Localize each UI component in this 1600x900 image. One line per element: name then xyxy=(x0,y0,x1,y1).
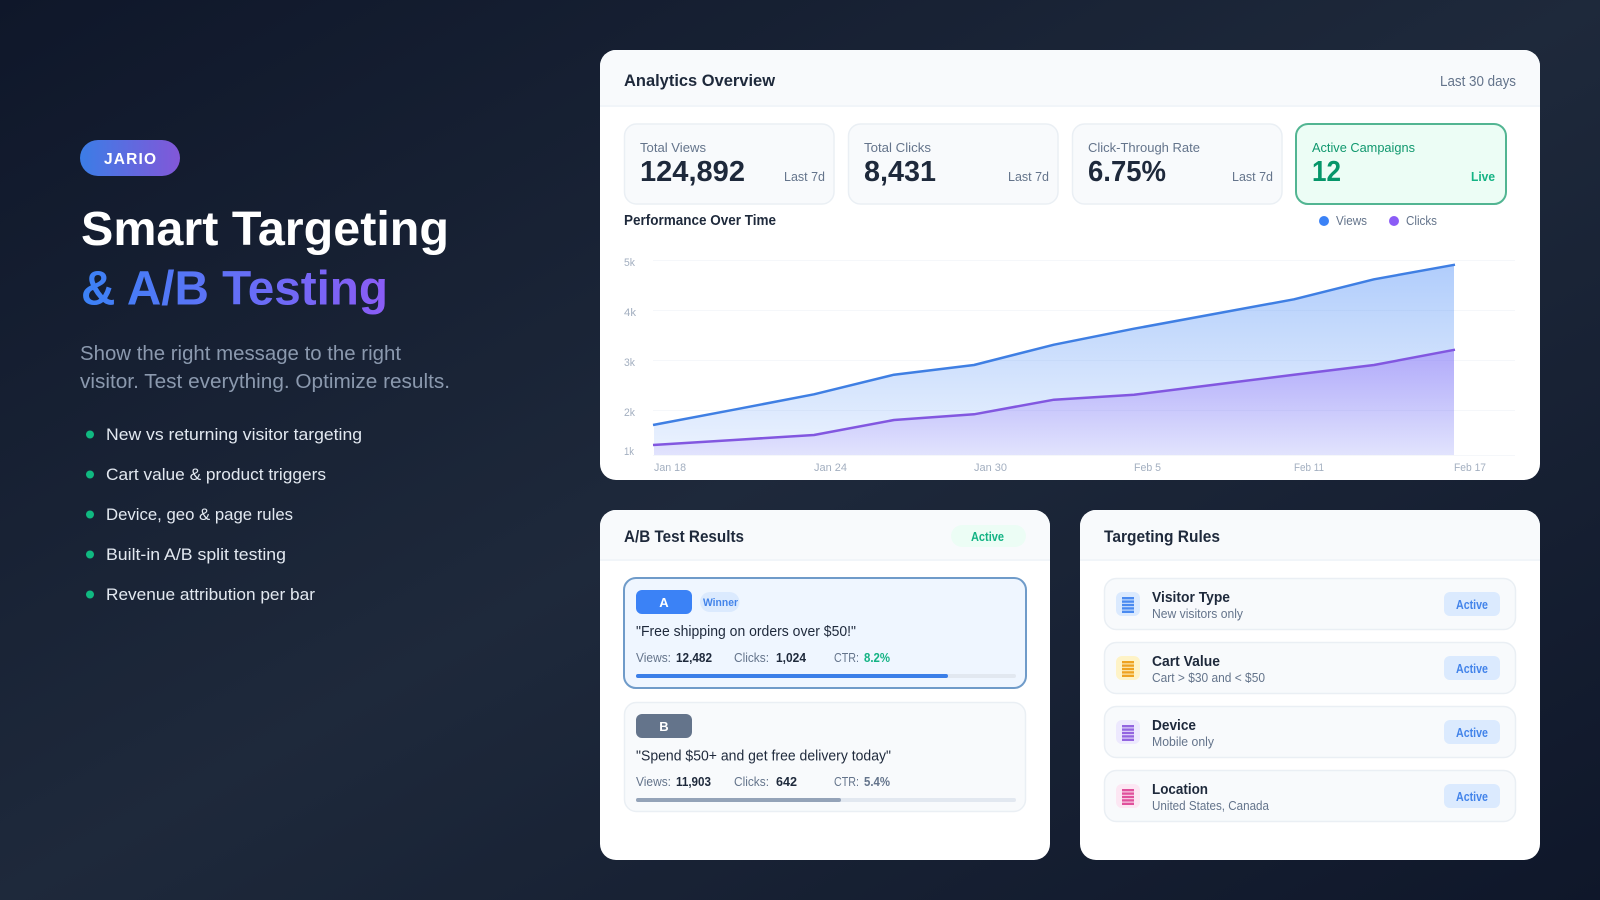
variant B progress bar xyxy=(636,798,1016,802)
subtitle: Show the right message to the right xyxy=(80,343,401,365)
area chart: performance over time xyxy=(624,257,1515,474)
variant B stats xyxy=(636,775,890,789)
rule: visitor type: New visitors only xyxy=(1152,607,1244,621)
icon: visitor type xyxy=(1116,592,1140,616)
title xyxy=(81,203,449,316)
feature: new vs returning: New vs returning visitor targeting xyxy=(106,425,362,444)
chart heading: Performance Over Time xyxy=(624,213,776,229)
x axis labels: Feb 17 xyxy=(1454,462,1486,474)
variant A stats: 8.2% xyxy=(864,651,890,665)
stat card: click-through rate xyxy=(1072,124,1282,204)
variant B stats: 5.4% xyxy=(864,775,890,789)
rule: device: Mobile only xyxy=(1152,735,1215,749)
subtitle xyxy=(80,343,450,393)
rule: visitor type xyxy=(1104,578,1516,630)
x axis labels: Jan 30 xyxy=(974,462,1007,474)
y axis labels: 2k xyxy=(624,407,635,419)
y axis labels: 3k xyxy=(624,357,635,369)
stat card: total views: Last 7d xyxy=(784,170,825,184)
left column: hero copy xyxy=(80,140,450,604)
variant A stats: Clicks: xyxy=(734,651,769,665)
subtitle: visitor. Test everything. Optimize results. xyxy=(80,371,450,393)
stat card: total views: 124,892 xyxy=(640,156,745,188)
variant B stats: CTR: xyxy=(834,775,859,789)
stat card: active campaigns: Active Campaigns xyxy=(1312,140,1415,155)
stat card: total clicks: 8,431 xyxy=(864,156,936,188)
status: cart value active: Active xyxy=(1456,662,1488,676)
status: location active: Active xyxy=(1456,790,1488,804)
panel header: targeting: Targeting Rules xyxy=(1104,528,1220,546)
status: cart value active xyxy=(1444,656,1500,680)
views area xyxy=(654,265,1454,455)
panel: A/B test results xyxy=(600,510,1050,860)
variant A stats xyxy=(636,651,890,665)
variant B stats: 642 xyxy=(776,775,797,789)
feature: cart value: Cart value & product triggers xyxy=(106,465,326,484)
status pill: active xyxy=(951,525,1026,547)
variant A message: "Free shipping on orders over $50!" xyxy=(636,624,856,640)
stat card: total clicks: Last 7d xyxy=(1008,170,1049,184)
y axis labels: 4k xyxy=(624,307,637,319)
variant B message: "Spend $50+ and get free delivery today" xyxy=(636,748,891,764)
winner tag xyxy=(700,592,740,612)
panel header: A/B test: A/B Test Results xyxy=(624,528,744,546)
y axis labels: 5k xyxy=(624,257,635,269)
stat card: click-through rate: Last 7d xyxy=(1232,170,1273,184)
status: visitor type active xyxy=(1444,592,1500,616)
y axis labels xyxy=(624,257,637,458)
variant B stats: 11,903 xyxy=(676,775,711,789)
stat card: active campaigns xyxy=(1296,124,1506,204)
stat card: total clicks xyxy=(848,124,1058,204)
status: device active: Active xyxy=(1456,726,1488,740)
x axis labels: Jan 18 xyxy=(654,462,686,474)
status: visitor type active: Active xyxy=(1456,598,1488,612)
rule: cart value xyxy=(1104,642,1516,694)
stat card: click-through rate: 6.75% xyxy=(1088,156,1166,188)
feature: split testing: Built-in A/B split testing xyxy=(106,545,286,564)
variant B stats: Views: xyxy=(636,775,671,789)
y axis labels: 1k xyxy=(624,446,634,458)
feature: revenue attribution: Revenue attribution per bar xyxy=(106,585,315,604)
views line xyxy=(653,265,1455,425)
variant A stats: CTR: xyxy=(834,651,859,665)
feature: device geo: Device, geo & page rules xyxy=(106,505,293,524)
variant A card xyxy=(624,578,1026,688)
clicks line xyxy=(653,350,1455,445)
variant B stats: Clicks: xyxy=(734,775,769,789)
stat card: click-through rate: Click-Through Rate xyxy=(1088,140,1200,155)
chart legend: Views xyxy=(1336,214,1367,228)
stat card: total views: Total Views xyxy=(640,140,707,155)
clicks area xyxy=(654,350,1454,455)
variant A stats: Views: xyxy=(636,651,671,665)
x axis labels xyxy=(654,462,1486,474)
rule: device: Device xyxy=(1152,718,1196,734)
brand pill: JARIO xyxy=(80,140,180,176)
panel header: analytics xyxy=(600,50,1540,107)
variant A progress bar xyxy=(636,674,1016,678)
rule: location: United States, Canada xyxy=(1152,799,1269,813)
x axis labels: Feb 5 xyxy=(1134,462,1161,474)
rule: location: Location xyxy=(1152,782,1208,798)
badge A: A xyxy=(659,595,669,610)
panel: analytics overview xyxy=(600,50,1540,480)
stat card: active campaigns: 12 xyxy=(1312,156,1341,188)
chart legend: Clicks xyxy=(1406,214,1437,228)
chart legend xyxy=(1319,214,1437,228)
rule: location xyxy=(1104,770,1516,822)
badge B: B xyxy=(659,719,669,734)
brand pill: JARIO: JARIO xyxy=(104,151,156,168)
variant A stats: 1,024 xyxy=(776,651,806,665)
icon: device xyxy=(1116,720,1140,744)
title: & A/B Testing xyxy=(81,262,388,316)
title: Smart Targeting xyxy=(81,203,449,256)
rule: cart value: Cart Value xyxy=(1152,654,1220,670)
panel header: A/B test xyxy=(600,510,1050,561)
panel header: analytics: Last 30 days xyxy=(1440,74,1516,90)
icon: location xyxy=(1116,784,1140,808)
status pill: active: Active xyxy=(971,530,1004,544)
panel header: targeting xyxy=(1080,510,1540,561)
panel: targeting rules xyxy=(1080,510,1540,860)
rule: visitor type: Visitor Type xyxy=(1152,590,1230,606)
status: device active xyxy=(1444,720,1500,744)
panel header: analytics: Analytics Overview xyxy=(624,72,775,90)
badge A xyxy=(636,590,692,614)
status: location active xyxy=(1444,784,1500,808)
rule: device xyxy=(1104,706,1516,758)
icon: cart value xyxy=(1116,656,1140,680)
badge B xyxy=(636,714,692,738)
stat card: active campaigns: Live xyxy=(1471,170,1495,184)
feature list xyxy=(86,425,362,604)
variant A stats: 12,482 xyxy=(676,651,712,665)
stat card: total views xyxy=(624,124,834,204)
rule: cart value: Cart > $30 and < $50 xyxy=(1152,671,1265,685)
winner tag: Winner xyxy=(703,597,739,609)
x axis labels: Feb 11 xyxy=(1294,462,1324,474)
x axis labels: Jan 24 xyxy=(814,462,847,474)
stat card: total clicks: Total Clicks xyxy=(864,140,931,155)
variant B card xyxy=(624,702,1026,812)
